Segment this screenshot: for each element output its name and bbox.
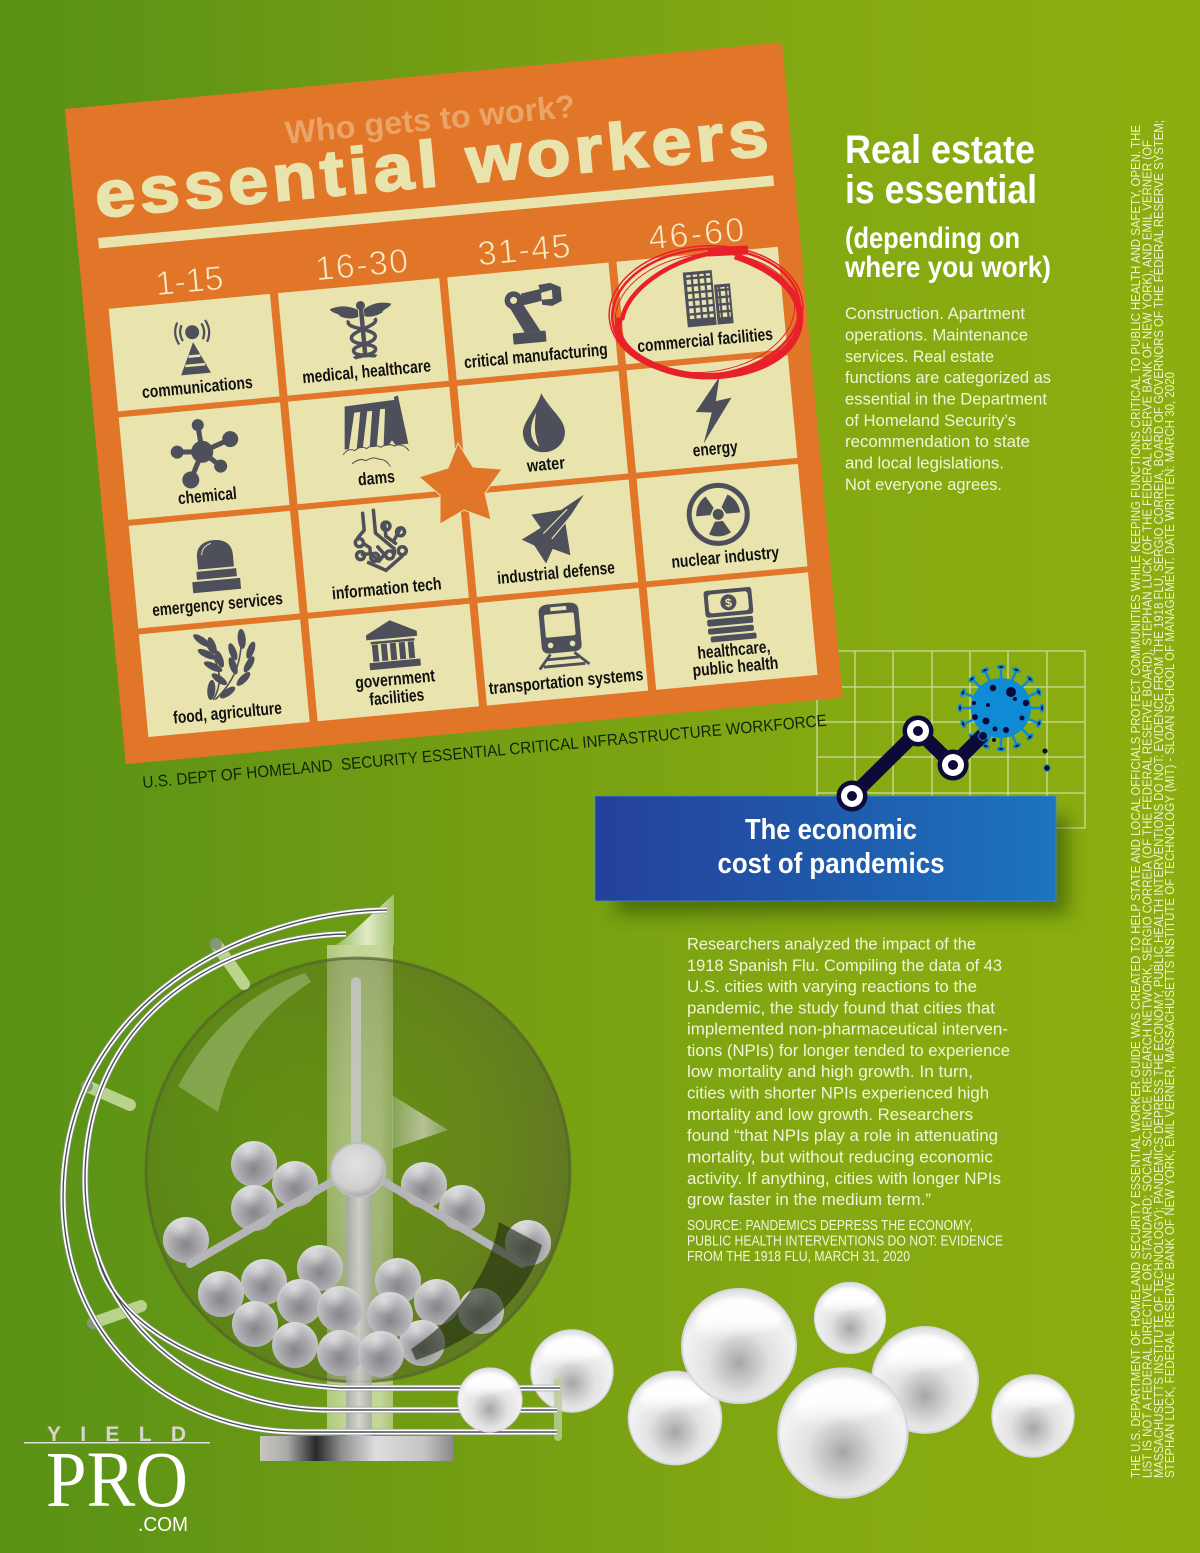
source note: PUBLIC HEALTH INTERVENTIONS DO NOT: EVIDENCE — [687, 1232, 1003, 1250]
red hand-drawn circle — [605, 239, 807, 383]
subheading: depending on where you work: where you work) — [844, 251, 1051, 284]
source note — [687, 1217, 1003, 1265]
logo word: pro: PRO — [46, 1437, 188, 1524]
banner: the economic cost of pandemics — [595, 796, 1068, 914]
vertical source text: LIST IS NOT A FEDERAL DIRECTIVE OR STANDARD; SOCIAL SCIENCE RESEARCH NETWORK, SERGIO CORREIA (OF THE FEDERAL RESERVE BOARD), STEPHAN LUCK (OF THE FEDERAL RESERVE BANK OF NEW YORK), AND EMIL VERNER (OF — [1140, 140, 1154, 1478]
cell: healthcare, public health — [647, 572, 817, 690]
caption: source of workforce list: U.S. DEPT OF HOMELAND SECURITY ESSENTIAL CRITICAL INFRASTRUCTURE WORKFORCE — [142, 712, 828, 792]
column label 16-30: 16-30 — [314, 242, 410, 288]
banner shadow — [616, 816, 1068, 914]
text block: real estate: functions are categorized as — [845, 369, 1051, 387]
cell: industrial defense: industrial defense — [496, 557, 616, 588]
vertical source text: STEPHAN LUCK, FEDERAL RESERVE BANK OF NEW YORK, EMIL VERNER, MASSACHUSETTS INSTITUTE OF TECHNOLOGY (MIT) - SLOAN SCHOOL OF MANAGEMENT. DATE WRITTEN: MARCH 30, 2020 — [1163, 372, 1177, 1478]
cell: nuclear industry: nuclear industry — [671, 542, 780, 572]
vertical source text: THE U.S. DEPARTMENT OF HOMELAND SECURITY ESSENTIAL WORKER GUIDE WAS CREATED TO HELP STATE AND LOCAL OFFICIALS PROTECT COMMUNITIES WHILE KEEPING FUNCTIONS CRITICAL TO PUBLIC HEALTH AND SAFETY, OPEN. THE — [1129, 125, 1143, 1478]
column label 46-60: 46-60 — [647, 211, 746, 258]
heading: real estate is essential: Real estate — [845, 128, 1035, 172]
base — [260, 1436, 453, 1461]
logo word: yield: YIELD — [47, 1423, 186, 1446]
subheading: depending on where you work — [844, 222, 1051, 284]
title: essential workers: essential workers — [92, 97, 771, 232]
cell: commercial facilities: commercial facilities — [636, 324, 774, 356]
balls — [163, 1141, 551, 1377]
text block: real estate: operations. Maintenance — [845, 326, 1028, 344]
text block: 1918 flu study: activity. If anything, cities with longer NPIs — [687, 1170, 1001, 1188]
cell: healthcare, public health: $ — [724, 596, 733, 610]
paddle arms — [190, 1180, 522, 1264]
cell: food, agriculture: food, agriculture — [172, 698, 283, 728]
cell: chemical: chemical — [177, 483, 238, 508]
cell: energy: energy — [692, 436, 739, 460]
logo word: .com: .COM — [138, 1514, 188, 1536]
text block: real estate — [845, 305, 1051, 494]
hub — [331, 1143, 385, 1197]
illustration: lottery machine — [63, 894, 613, 1461]
glass sphere — [146, 958, 570, 1382]
clamps — [81, 938, 558, 1437]
text block: 1918 flu study — [687, 936, 1010, 1209]
kicker: who gets to work: Who gets to work? — [283, 88, 577, 151]
column label 1-15: 1-15 — [154, 259, 225, 303]
cell: information tech: information tech — [331, 573, 442, 603]
cell: water — [457, 371, 628, 489]
text block: 1918 flu study: U.S. cities with varying reactions to the — [687, 978, 977, 996]
chart grid — [817, 651, 1085, 828]
text block: 1918 flu study: mortality, but without reducing economic — [687, 1148, 993, 1166]
text block: real estate: services. Real estate — [845, 348, 994, 366]
icon: virus — [958, 665, 1044, 751]
logo rule — [24, 1442, 210, 1444]
cell: healthcare, public health: healthcare, — [697, 636, 771, 663]
cell: transportation systems — [477, 588, 648, 706]
text block: real estate: Not everyone agrees. — [845, 476, 1002, 494]
cell: dams — [288, 387, 459, 504]
text block: 1918 flu study: Researchers analyzed the impact of the — [687, 936, 976, 954]
text block: 1918 flu study: pandemic, the study found that cities that — [687, 1000, 995, 1018]
banner box — [595, 796, 1056, 901]
panel background — [65, 42, 843, 764]
cell: chemical — [119, 402, 290, 520]
sphere shadow — [411, 1222, 542, 1360]
logo: Yield Pro — [24, 1423, 210, 1536]
banner heading: The economic — [745, 814, 917, 846]
cell: dams: dams — [357, 466, 396, 489]
cell: food, agriculture — [139, 619, 310, 737]
cell: government facilities: facilities — [368, 684, 425, 709]
text block: real estate: Construction. Apartment — [845, 305, 1025, 323]
cell: communications: communications — [141, 372, 254, 402]
heading: real estate is essential: is essential — [845, 168, 1037, 212]
cell: medical, healthcare — [278, 278, 449, 396]
text block: 1918 flu study: implemented non-pharmaceutical interven- — [687, 1020, 1008, 1038]
cell: commercial facilities — [616, 247, 787, 364]
top triangle fin — [336, 894, 394, 945]
side triangle fin — [392, 1095, 448, 1149]
cell: critical manufacturing — [447, 262, 618, 380]
large ball behind rails — [531, 1330, 613, 1412]
text block: real estate: recommendation to state — [845, 433, 1030, 451]
text block: 1918 flu study: found “that NPIs play a role in attenuating — [687, 1127, 998, 1145]
subheading: depending on where you work: (depending on — [845, 222, 1020, 255]
white balls — [628, 1282, 1074, 1498]
cell: water: water — [525, 452, 566, 476]
column label 31-45: 31-45 — [476, 227, 572, 273]
source note: FROM THE 1918 FLU, MARCH 31, 2020 — [687, 1248, 910, 1265]
center tube — [327, 945, 393, 1434]
cell: healthcare, public health: public health — [692, 653, 779, 680]
cell: nuclear industry — [637, 464, 807, 581]
cell: medical, healthcare: medical, healthcare — [301, 355, 432, 387]
text block: real estate: essential in the Department — [845, 390, 1047, 408]
cell: transportation systems: transportation systems — [488, 664, 644, 698]
cell: government facilities — [308, 604, 479, 721]
text block: 1918 flu study: tions (NPIs) for longer tended to experience — [687, 1042, 1010, 1060]
cell: communications — [109, 294, 279, 411]
ball on rail — [458, 1368, 522, 1432]
line chart — [836, 716, 1050, 812]
heading: real estate is essential — [845, 128, 1037, 212]
text block: real estate: of Homeland Security’s — [845, 412, 1016, 430]
cell: emergency services: emergency services — [151, 588, 284, 620]
vertical source text — [1129, 120, 1177, 1478]
title rule — [98, 175, 774, 248]
cell: critical manufacturing: critical manufacturing — [463, 339, 608, 372]
text block: 1918 flu study: grow faster in the medium term.” — [687, 1191, 931, 1209]
sphere highlight — [178, 973, 311, 1112]
text block: 1918 flu study: 1918 Spanish Flu. Compiling the data of 43 — [687, 957, 1002, 975]
cell: emergency services — [129, 511, 300, 628]
panel: essential workers — [65, 42, 843, 764]
vertical source text: MASSACHUSETTS INSTITUTE OF TECHNOLOGY); PANDEMICS DEPRESS THE ECONOMY, PUBLIC HEALTH INTERVENTIONS DO NOT: EVIDENCE FROM THE 1918 FLU, SERGIO CORREIA, BOARD OF GOVERNORS OF THE FEDERAL RESERVE SYSTEM; — [1152, 120, 1166, 1478]
banner heading: cost of pandemics — [718, 848, 944, 880]
text block: 1918 flu study: mortality and low growth. Researchers — [687, 1106, 973, 1124]
source note: SOURCE: PANDEMICS DEPRESS THE ECONOMY, — [687, 1217, 973, 1234]
vertical rod — [346, 977, 372, 1436]
cell: information tech — [298, 495, 469, 613]
cell: industrial defense — [467, 480, 638, 597]
banner heading — [718, 814, 944, 880]
star — [419, 443, 502, 524]
cell: energy — [627, 355, 797, 473]
rails — [63, 910, 560, 1432]
cell: government facilities: government — [354, 665, 436, 693]
text block: real estate: and local legislations. — [845, 454, 1004, 472]
text block: 1918 flu study: cities with shorter NPIs experienced high — [687, 1084, 989, 1102]
text block: 1918 flu study: low mortality and high growth. In turn, — [687, 1063, 973, 1081]
